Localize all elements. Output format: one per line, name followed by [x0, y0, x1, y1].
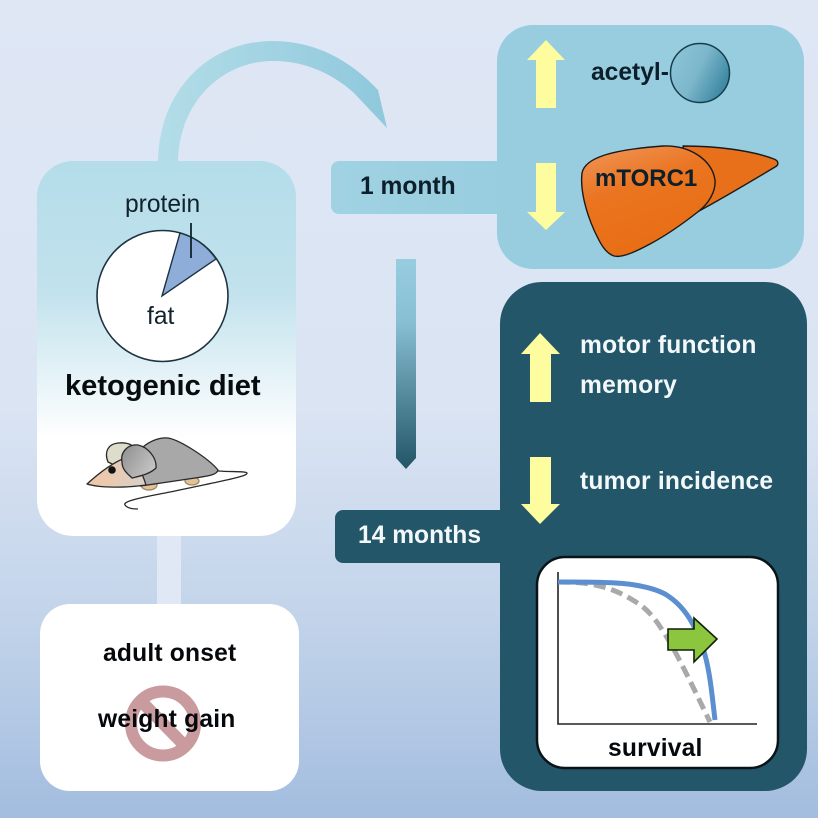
icon: acetyl ball [670, 44, 730, 102]
curved arrow from diet to 1 month [158, 41, 387, 163]
down arrow [527, 163, 565, 230]
panel: 14 months [335, 282, 807, 791]
label: mTORC1: mTORC1 [595, 165, 697, 192]
icon: green arrow [668, 618, 717, 662]
heading: ketogenic diet: ketogenic diet [65, 370, 261, 402]
up arrow [527, 40, 565, 108]
label: motor function: motor function [580, 332, 757, 359]
label: protein: protein [125, 191, 200, 218]
connector between diet panel and adult onset panel [157, 530, 181, 610]
label: fat: fat [147, 303, 175, 330]
pie chart: protein and fat [97, 223, 228, 362]
icon: liver [582, 146, 778, 256]
label: adult onset: adult onset [103, 640, 236, 667]
panel: 1 month [331, 25, 804, 269]
label: weight gain: weight gain [97, 706, 235, 733]
gradient arrow: time from 1 to 14 months [396, 259, 416, 469]
down arrow [521, 457, 560, 524]
survival chart [537, 557, 778, 768]
label: 14 months: 14 months [358, 522, 481, 549]
label: survival: survival [608, 735, 703, 762]
icon: mouse [87, 438, 247, 509]
up arrow [521, 333, 560, 402]
label: 1 month: 1 month [360, 173, 456, 200]
panel: adult onset [40, 604, 299, 791]
icon: prohibition sign [131, 692, 195, 756]
label: memory: memory [580, 372, 677, 399]
panel: ketogenic diet [37, 161, 296, 536]
label: tumor incidence: tumor incidence [580, 468, 773, 495]
label: acetyl: acetyl- [591, 59, 669, 86]
